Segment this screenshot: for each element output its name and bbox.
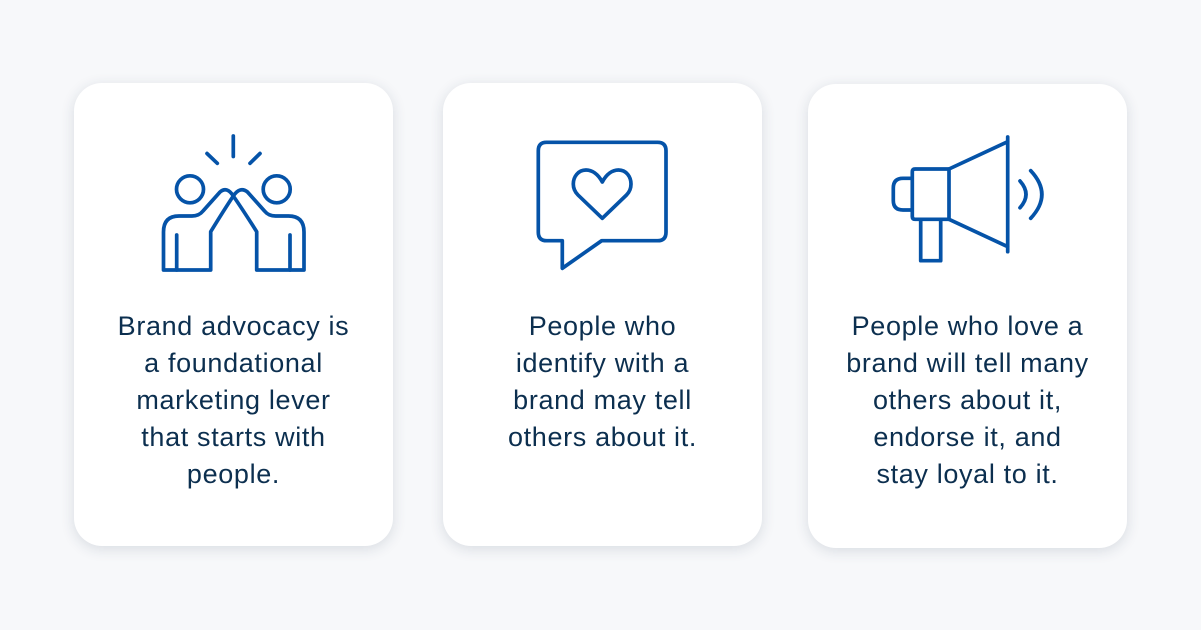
text: love a brand: [846, 311, 1089, 489]
text: love a brand: stay loyal to it.: [876, 459, 1059, 489]
icon: two people high five: [162, 134, 306, 272]
text: identify with brand: identify with a: [516, 348, 689, 378]
text: love a brand: brand will tell many: [846, 348, 1089, 378]
text: brand advocacy: a foundational: [144, 348, 323, 378]
text: identify with brand: People who: [529, 311, 676, 341]
text: love a brand: People who love a: [852, 311, 1083, 341]
text: brand advocacy: marketing lever: [136, 385, 331, 415]
text: identify with brand: others about it.: [508, 422, 697, 452]
panel: identify with brand card: [443, 83, 762, 546]
panel: brand advocacy card: [74, 83, 393, 546]
text: brand advocacy: Brand advocacy is: [118, 311, 349, 341]
panel: love a brand card: [808, 84, 1127, 548]
text: identify with brand: brand may tell: [513, 385, 692, 415]
text: love a brand: endorse it, and: [873, 422, 1062, 452]
text: brand advocacy: [118, 311, 349, 489]
text: identify with brand: [508, 311, 697, 452]
text: brand advocacy: that starts with: [141, 422, 326, 452]
icon: speech bubble with heart: [536, 140, 668, 270]
text: love a brand: others about it,: [873, 385, 1062, 415]
text: brand advocacy: people.: [187, 459, 280, 489]
icon: megaphone: [891, 135, 1044, 262]
